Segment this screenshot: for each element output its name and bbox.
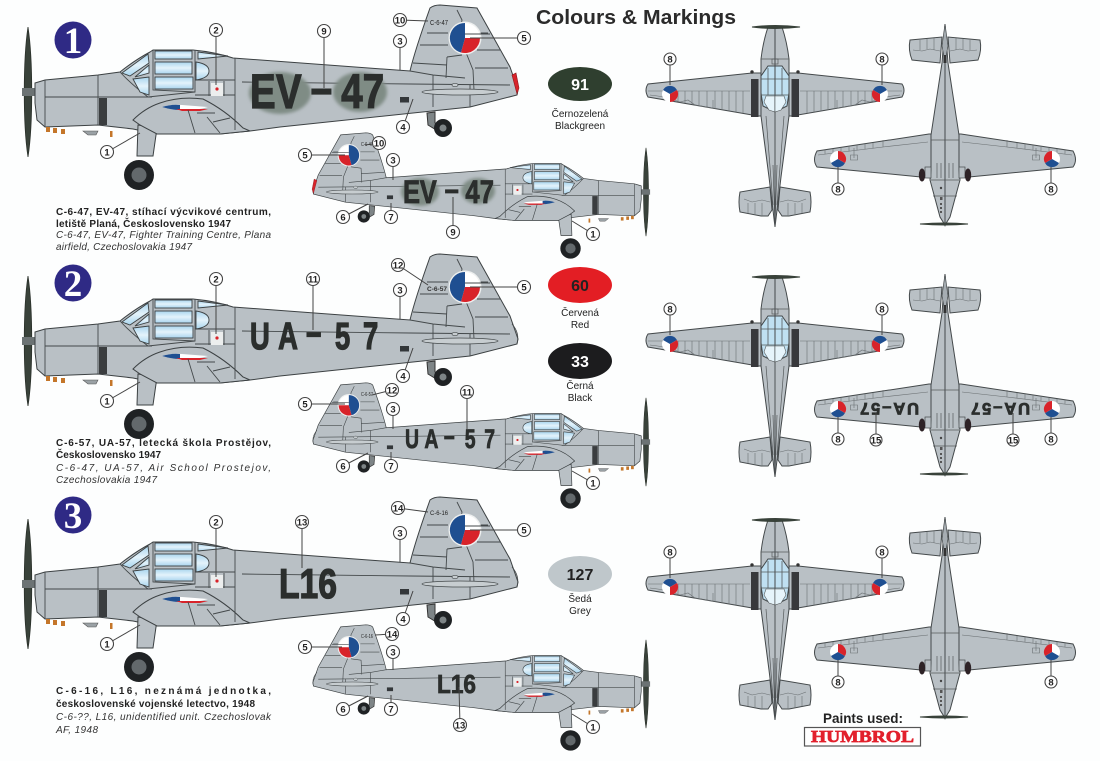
- callouts: aircraft 1 large: 10: [395, 16, 405, 26]
- callouts: aircraft 2 plan views: 8: [879, 304, 885, 316]
- badge: scheme 2: 2: [64, 264, 82, 305]
- callouts: aircraft 2 small: 6: [340, 462, 346, 472]
- caption: scheme 1: letiště Planá, Československo 1947: [56, 217, 231, 230]
- title: Colours & Markings: [536, 7, 736, 29]
- callouts: aircraft 2 large: [100, 258, 530, 408]
- callouts: aircraft 3 large: 13: [297, 518, 307, 528]
- caption: scheme 2: [56, 438, 271, 486]
- paint chip: 33 Black: 33: [571, 354, 589, 371]
- callouts: aircraft 1 large: 9: [321, 26, 327, 38]
- paint chip: 127 Grey: Šedá: [568, 592, 592, 605]
- callouts: aircraft 3 small: 5: [302, 642, 308, 654]
- callouts: aircraft 2 small: [298, 384, 600, 490]
- callouts: aircraft 1 large: 2: [213, 26, 219, 36]
- callouts: aircraft 3 small: 3: [390, 648, 396, 658]
- callouts: aircraft 1 small: 10: [374, 138, 384, 150]
- callouts: aircraft 3 plan views: 8: [1048, 678, 1054, 688]
- callouts: aircraft 3 large: 3: [397, 528, 403, 540]
- caption: scheme 1: airfield, Czechoslovakia 1947: [56, 242, 192, 253]
- aircraft 2: large left side view: [22, 254, 518, 439]
- aircraft 1: large left side view: C-6-47: [430, 20, 448, 27]
- aircraft 1: small right side view: EV–47: [403, 172, 494, 211]
- callouts: aircraft 3 small: 7: [388, 704, 394, 716]
- aircraft 2: large left side view: C-6-57: [427, 287, 448, 293]
- paint chip: 60 Red: [548, 267, 612, 331]
- aircraft 3: small right side view: C-6-16: [361, 634, 373, 640]
- callouts: aircraft 1 large: [100, 14, 530, 158]
- callouts: aircraft 2 large: 12: [393, 260, 403, 272]
- callouts: aircraft 1 plan views: 8: [667, 54, 673, 66]
- callouts: aircraft 3 large: 14: [393, 504, 404, 514]
- paint chip: 91 Blackgreen: Černozelená: [552, 107, 609, 120]
- callouts: aircraft 1 large: 3: [397, 36, 403, 48]
- badge: scheme 3: [54, 496, 92, 537]
- badge: scheme 3: 3: [64, 496, 82, 537]
- callouts: aircraft 2 large: 3: [397, 286, 403, 296]
- humbrol logo: HUMBROL: [811, 727, 914, 746]
- callouts: aircraft 2 plan views: 8: [1048, 434, 1054, 446]
- aircraft 1: small right side view: C-6-47: [361, 142, 373, 148]
- callouts: aircraft 1 plan views: 8: [879, 54, 885, 66]
- aircraft 2: top view: [646, 276, 904, 477]
- aircraft 1: top view: [646, 26, 904, 227]
- callouts: aircraft 2 large: 4: [400, 372, 406, 382]
- aircraft 1: large left side view: EV–47: [250, 63, 384, 119]
- callouts: aircraft 2 large: 5: [521, 282, 527, 294]
- paint chip: 33 Black: Černá: [566, 379, 594, 392]
- callouts: aircraft 2 small: 5: [302, 400, 308, 410]
- callouts: aircraft 2 plan views: [664, 303, 1057, 446]
- aircraft 3: large left side view: [22, 497, 518, 682]
- caption: scheme 2: C-6-47, UA-57, Air School Prostejov,: [56, 463, 271, 474]
- callouts: aircraft 2 large: 2: [213, 274, 219, 286]
- aircraft 3: small right side view: L16: [437, 669, 476, 699]
- callouts: aircraft 3 small: 14: [387, 630, 398, 640]
- caption: scheme 1: C-6-47, EV-47, Fighter Training Centre, Plana: [56, 230, 271, 241]
- paint chip: 91 Blackgreen: [548, 67, 612, 132]
- callouts: aircraft 2 small: 7: [388, 462, 394, 472]
- callouts: aircraft 3 plan views: 8: [667, 548, 673, 558]
- callouts: aircraft 1 large: 5: [521, 34, 527, 44]
- callouts: aircraft 2 small: 11: [462, 388, 473, 398]
- caption: scheme 2: Československo 1947: [56, 448, 161, 461]
- aircraft 1: large left side view: [22, 5, 519, 190]
- callouts: aircraft 1 small: 3: [390, 156, 396, 166]
- callouts: aircraft 1 plan views: 8: [835, 184, 841, 196]
- callouts: aircraft 1 small: 5: [302, 150, 308, 162]
- aircraft 2: underside view: UA–57: [860, 399, 919, 417]
- callouts: aircraft 3 large: 2: [213, 518, 219, 528]
- badge: scheme 1: 1: [64, 21, 82, 62]
- paint chip: 60 Red: 60: [571, 278, 589, 295]
- paint chip: 33 Black: Black: [568, 393, 593, 404]
- callouts: aircraft 3 small: [298, 628, 600, 734]
- caption: scheme 3: C-6-??, L16, unidentified unit. Czechoslovak: [56, 712, 272, 723]
- callouts: aircraft 3 large: 1: [104, 640, 110, 650]
- paint chip: 33 Black: [548, 343, 612, 404]
- callouts: aircraft 3 plan views: [664, 546, 1057, 688]
- caption: scheme 3: československé vojenské letectvo, 1948: [56, 699, 255, 710]
- callouts: aircraft 1 large: 4: [400, 122, 406, 134]
- paint chip: 91 Blackgreen: Blackgreen: [555, 121, 605, 132]
- paint chip: 60 Red: Červená: [561, 306, 599, 319]
- callouts: aircraft 2 plan views: 8: [835, 434, 841, 446]
- callouts: aircraft 3 large: [100, 502, 530, 650]
- aircraft 2: underside view: UA–57: [971, 399, 1030, 417]
- callouts: aircraft 3 large: 5: [521, 526, 527, 536]
- callouts: aircraft 1 small: [298, 136, 600, 240]
- callouts: aircraft 1 plan views: 8: [1048, 184, 1054, 196]
- callouts: aircraft 3 small: 13: [455, 720, 465, 732]
- aircraft 3: large left side view: C-6-16: [430, 511, 449, 517]
- aircraft 3: large left side view: L16: [279, 560, 337, 607]
- aircraft 2: small right side view: UA–57: [405, 421, 495, 454]
- aircraft 2: small right side view: C-6-57: [361, 392, 373, 398]
- caption: scheme 3: AF, 1948: [55, 725, 98, 736]
- callouts: aircraft 1 small: 6: [340, 212, 346, 224]
- paint chip: 127 Grey: [548, 556, 612, 617]
- callouts: aircraft 2 small: 12: [387, 386, 397, 396]
- paint chip: 127 Grey: 127: [567, 567, 593, 584]
- callouts: aircraft 1 small: 7: [388, 212, 394, 224]
- caption: scheme 1: [56, 207, 271, 253]
- aircraft 3: underside view: [814, 517, 1076, 718]
- aircraft 2: underside view: [814, 274, 1076, 475]
- paint chip: 60 Red: Red: [571, 320, 589, 331]
- callouts: aircraft 2 plan views: 8: [667, 304, 673, 316]
- aircraft 1: small right side view: [312, 133, 650, 259]
- callouts: aircraft 1 small: 9: [450, 228, 456, 238]
- callouts: aircraft 2 small: 1: [590, 478, 596, 490]
- paint chip: 91 Blackgreen: 91: [571, 77, 589, 94]
- callouts: aircraft 3 plan views: 8: [879, 548, 885, 558]
- callouts: aircraft 2 large: 11: [308, 274, 319, 286]
- callouts: aircraft 2 small: 3: [390, 404, 396, 416]
- caption: scheme 3: C-6-16, L16, neznámá jednotka,: [56, 686, 271, 697]
- aircraft 1: underside view: [814, 24, 1076, 225]
- callouts: aircraft 3 plan views: 8: [835, 678, 841, 688]
- callouts: aircraft 3 small: 1: [590, 722, 596, 734]
- callouts: aircraft 1 plan views: [664, 53, 1057, 196]
- callouts: aircraft 2 plan views: 15: [871, 436, 882, 446]
- aircraft 2: small right side view: [313, 383, 650, 509]
- callouts: aircraft 3 small: 6: [340, 704, 346, 716]
- callouts: aircraft 1 large: 1: [104, 148, 110, 158]
- aircraft 3: top view: [646, 518, 904, 720]
- callouts: aircraft 2 large: 1: [104, 396, 110, 408]
- aircraft 3: small right side view: [313, 625, 650, 751]
- callouts: aircraft 2 plan views: 15: [1008, 436, 1019, 446]
- aircraft 2: large left side view: UA–57: [250, 312, 378, 358]
- badge: scheme 2: [54, 264, 92, 305]
- caption: scheme 1: C-6-47, EV-47, stíhací výcvikové centrum,: [56, 207, 271, 218]
- caption: scheme 2: C-6-57, UA-57, letecká škola Prostějov,: [56, 438, 271, 449]
- paints used label: Paints used:: [823, 710, 903, 726]
- badge: scheme 1: [54, 21, 92, 62]
- caption: scheme 3: [55, 686, 272, 736]
- callouts: aircraft 3 large: 4: [400, 614, 406, 626]
- paint chip: 127 Grey: Grey: [569, 606, 591, 617]
- callouts: aircraft 1 small: 1: [590, 230, 596, 240]
- caption: scheme 2: Czechoslovakia 1947: [56, 475, 157, 486]
